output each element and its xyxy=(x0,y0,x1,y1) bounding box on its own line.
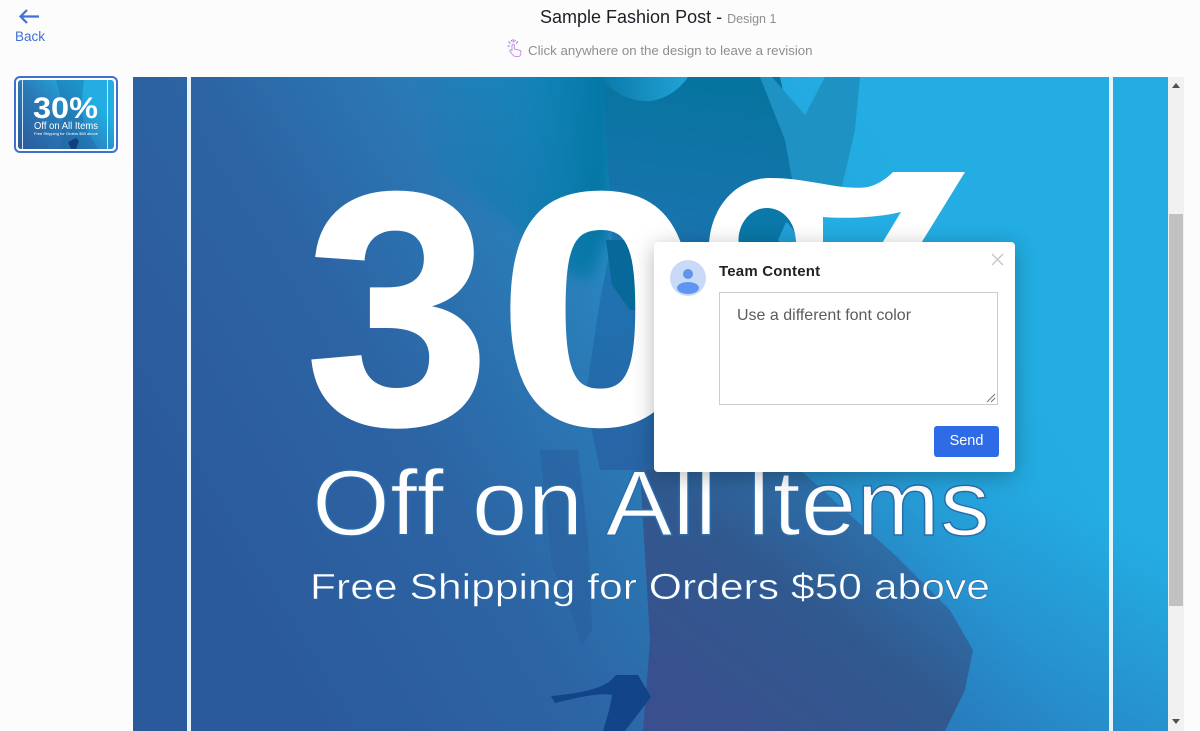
torso xyxy=(585,77,805,470)
right white rule xyxy=(1109,77,1113,731)
scroll thumb xyxy=(1169,214,1183,606)
percent sign: % xyxy=(700,124,993,493)
dress xyxy=(640,470,973,731)
percent counter highlight xyxy=(778,222,796,250)
percent counter xyxy=(738,208,796,272)
instruction line xyxy=(508,39,813,58)
scroll up arrow xyxy=(1172,83,1180,88)
hat xyxy=(600,77,688,101)
thumbnail artwork: Off on All Items xyxy=(34,121,98,132)
comment text box xyxy=(719,292,998,405)
digit three: 3 xyxy=(306,124,490,493)
back label: Back xyxy=(15,29,45,44)
back button xyxy=(15,9,45,44)
percent swoosh xyxy=(709,172,965,245)
hair xyxy=(410,60,615,280)
scroll down arrow xyxy=(1172,719,1180,724)
thumbnail artwork: Free Shipping for Orders $50 above xyxy=(34,131,99,136)
resize handle xyxy=(986,394,996,402)
30 percent headline xyxy=(306,124,993,494)
icon: close xyxy=(992,254,1004,266)
thumbnail xyxy=(14,76,118,153)
title: Sample Fashion Post - Design 1 xyxy=(540,7,776,27)
thumbnail artwork xyxy=(18,80,114,149)
commenter name: Team Content xyxy=(719,263,820,280)
icon: back arrow xyxy=(19,9,39,24)
left white rule xyxy=(187,77,191,731)
thumbnail artwork: 30% xyxy=(33,92,98,125)
instruction text: Click anywhere on the design to leave a revision xyxy=(528,43,813,58)
dark sleeve xyxy=(606,240,660,310)
gradient background xyxy=(133,77,1168,731)
raised arm xyxy=(760,77,860,195)
scrollbar xyxy=(1168,77,1184,731)
percent wedge xyxy=(823,212,901,245)
digit zero: 0 xyxy=(498,125,704,494)
icon: avatar xyxy=(670,260,706,296)
icon: tapping hand xyxy=(508,39,522,57)
shipping line: Free Shipping for Orders $50 above xyxy=(310,566,990,607)
send button xyxy=(934,426,999,457)
design artwork panel xyxy=(133,77,1168,731)
high heel shoe xyxy=(551,675,651,731)
send button: Send xyxy=(950,433,983,449)
model silhouette xyxy=(410,60,973,731)
subheading: Off on All Items xyxy=(312,451,990,555)
bottom right shading xyxy=(700,470,1168,731)
lower arm xyxy=(540,450,592,645)
comment dialog xyxy=(654,242,1015,472)
comment text: Use a different font color xyxy=(737,307,911,324)
